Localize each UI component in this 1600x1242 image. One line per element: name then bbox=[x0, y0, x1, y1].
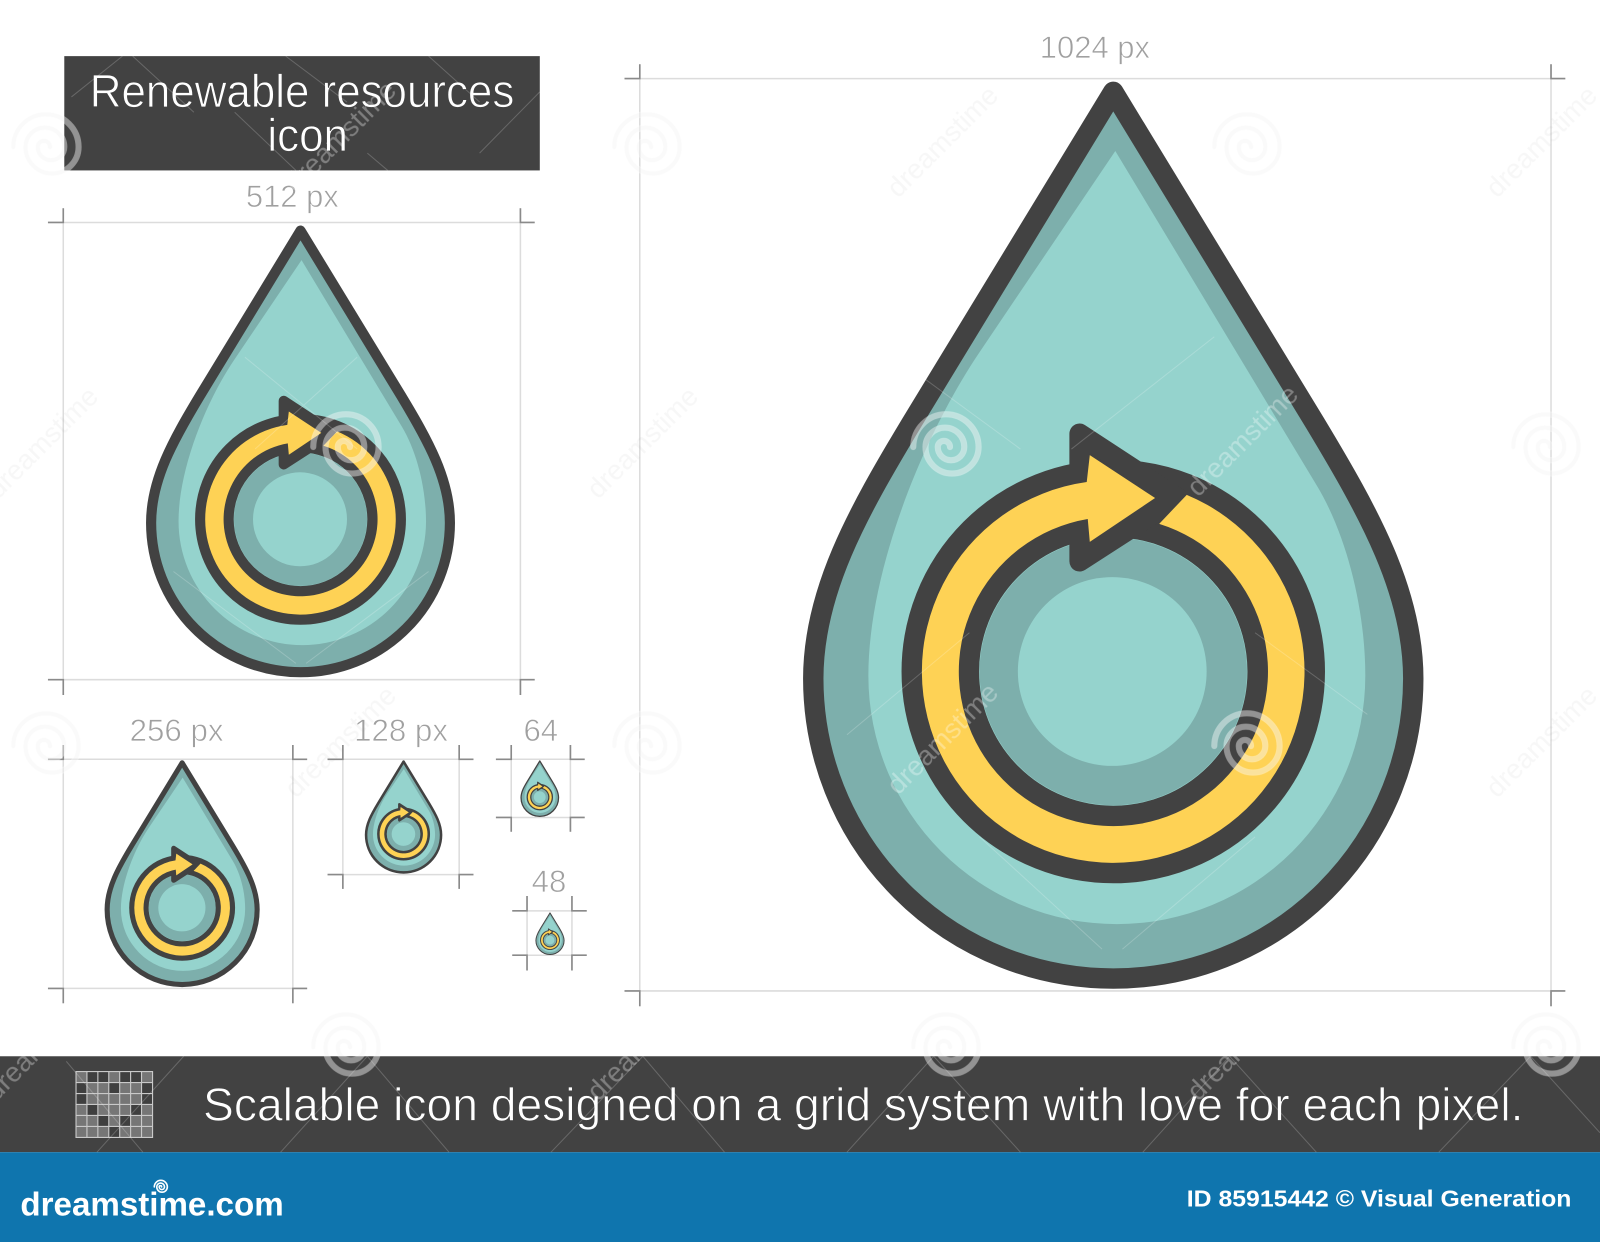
watermark text over dark and coloured areas: dreamstime bbox=[1180, 378, 1304, 502]
guide frame: 512 px bbox=[48, 208, 535, 695]
icon: 512 px water drop bbox=[151, 231, 450, 672]
site logo: dreamstime.com bbox=[20, 1186, 284, 1223]
watermark text on white areas: dreamstime bbox=[580, 380, 704, 504]
watermark text over dark and coloured areas: dreamstime bbox=[580, 983, 704, 1106]
icon: pixel grid bbox=[76, 1072, 153, 1137]
panel: 48 px icon bbox=[512, 863, 587, 971]
grid system caption: Scalable icon designed on a grid system with love for each pixel. bbox=[203, 1079, 1523, 1131]
icon: 256 px water drop bbox=[107, 763, 257, 985]
watermark text on white areas: dreamstime bbox=[278, 679, 402, 803]
watermark text on white areas: dreamstime bbox=[880, 79, 1004, 203]
panel: 512 px icon bbox=[48, 178, 535, 695]
image credit: ID 85915442 © Visual Generation bbox=[1187, 1185, 1571, 1211]
icon: 48 px water drop bbox=[536, 913, 564, 955]
guide frame: 256 px bbox=[48, 745, 307, 1003]
icon: 128 px water drop bbox=[366, 762, 441, 872]
icon: 64 px water drop bbox=[521, 761, 559, 816]
watermark text over dark and coloured areas: dreamstime bbox=[1180, 983, 1304, 1106]
watermark text over dark and coloured areas: dreamstime bbox=[880, 676, 1004, 800]
size label: 256 px: 256 px bbox=[130, 712, 224, 748]
watermark text on white areas: dreamstime bbox=[1479, 679, 1600, 803]
panel: 128 px icon bbox=[328, 712, 473, 889]
title banner bbox=[64, 56, 540, 170]
watermark spirals bbox=[13, 114, 1579, 1074]
watermark text over dark and coloured areas bbox=[0, 74, 1304, 1106]
panel: 1024 px icon bbox=[624, 29, 1565, 1006]
panel: 256 px icon bbox=[48, 712, 307, 1003]
panel: 64 px icon bbox=[496, 712, 585, 832]
size label: 512 px: 512 px bbox=[246, 178, 339, 214]
watermark text on white areas bbox=[0, 79, 1600, 803]
guide frame: 48 px bbox=[512, 896, 587, 971]
watermark text on white areas: dreamstime bbox=[1479, 79, 1600, 203]
guide frame: 1024 px bbox=[624, 64, 1565, 1006]
size label: 64: 64 bbox=[523, 712, 558, 748]
size label: 128 px: 128 px bbox=[354, 712, 448, 748]
size label: 1024 px: 1024 px bbox=[1040, 29, 1150, 65]
icon: large water drop with circular arrow bbox=[813, 92, 1413, 979]
footer bar bbox=[0, 1152, 1600, 1242]
watermark text over dark and coloured areas: dreamstime bbox=[278, 74, 402, 198]
grid system banner bbox=[0, 1056, 1600, 1152]
guide frame: 64 px bbox=[496, 745, 585, 832]
title banner: Renewable resources bbox=[90, 65, 514, 117]
guide frame: 128 px bbox=[328, 745, 473, 889]
size label: 48: 48 bbox=[532, 863, 566, 899]
title banner: icon bbox=[267, 109, 348, 161]
